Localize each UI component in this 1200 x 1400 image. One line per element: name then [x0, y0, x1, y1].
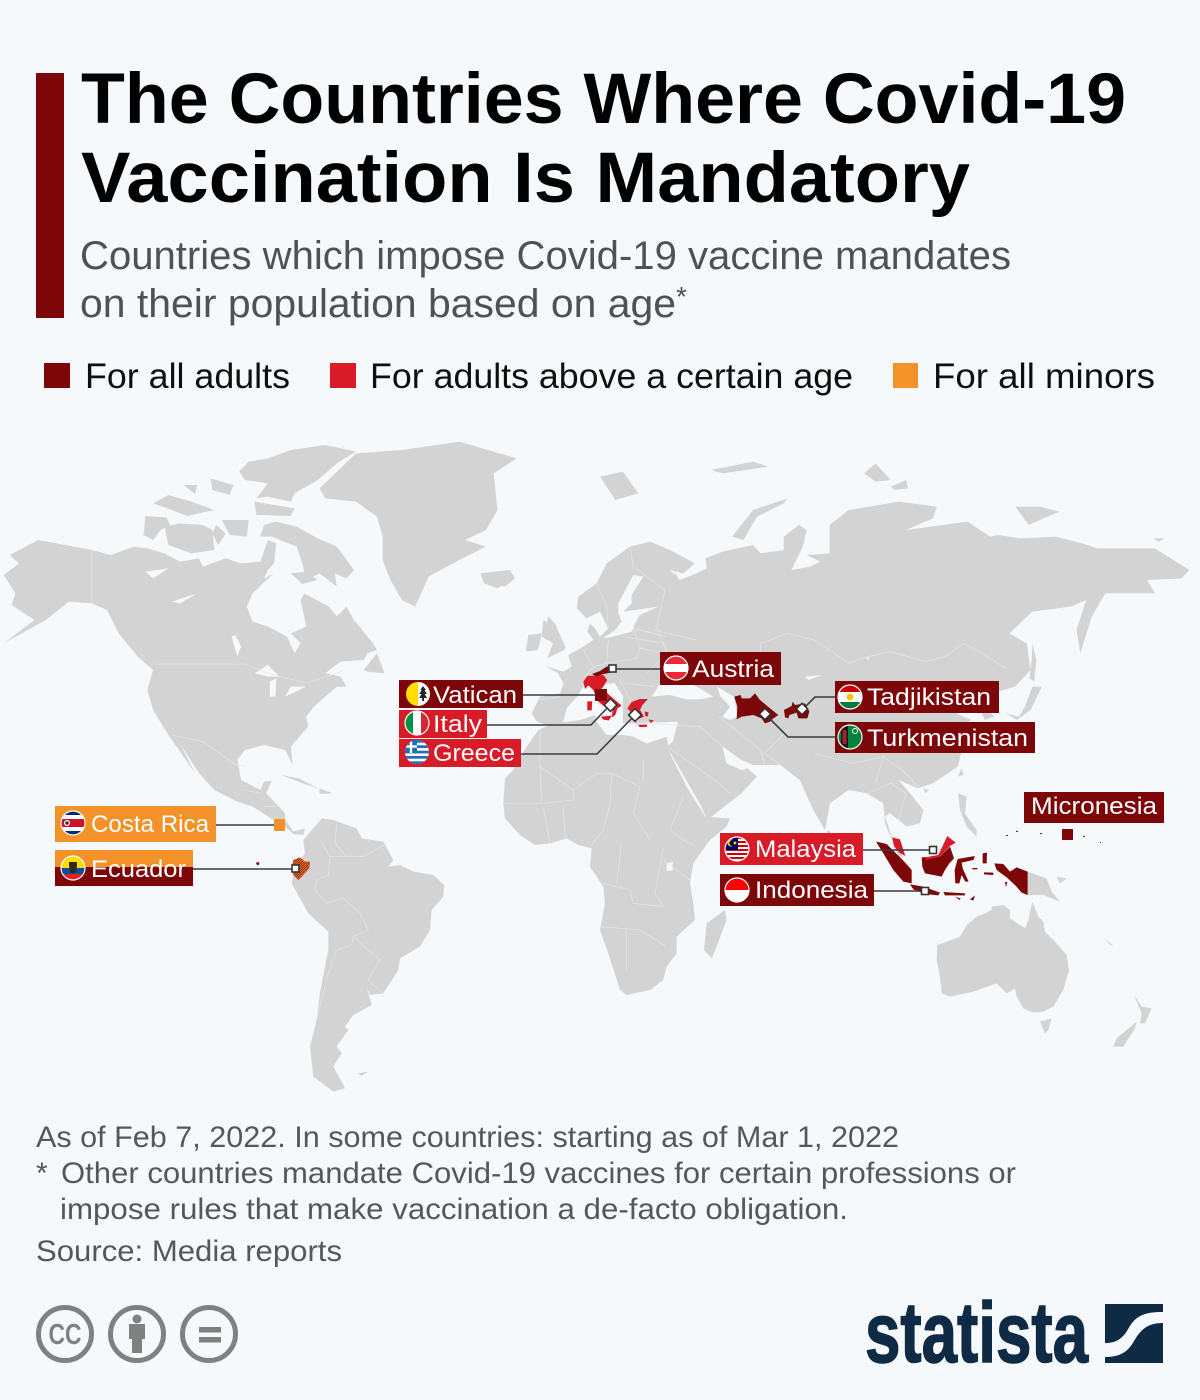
- icon: no derivatives: [182, 1308, 236, 1360]
- callout: vatican: [399, 680, 607, 709]
- callout: austria: [609, 652, 781, 685]
- callout: turkmenistan: [759, 708, 1035, 753]
- callout: malaysia: [720, 833, 936, 865]
- highlighted: austria: [592, 665, 616, 676]
- highlighted: ecuador: [256, 857, 310, 880]
- source: Source: Media reports: [36, 1235, 342, 1268]
- footnotes: [36, 1121, 1016, 1226]
- callout: italy: Italy: [433, 711, 483, 738]
- legend item: for all adults: For all adults: [85, 357, 290, 396]
- subtitle: on their population based on age: [80, 282, 676, 326]
- callout: indonesia: Indonesia: [755, 877, 868, 904]
- title: [81, 60, 1126, 218]
- callout: greece: [399, 709, 641, 767]
- legend item: for adults above a certain age: For adults above a certain age: [370, 357, 853, 396]
- icon: attribution: [110, 1308, 164, 1360]
- callout: ecuador: Ecuador: [91, 856, 186, 883]
- asia: [600, 462, 1189, 857]
- callout: turkmenistan: Turkmenistan: [867, 725, 1028, 752]
- subtitle: [80, 234, 1011, 326]
- north america lakes: [145, 568, 306, 697]
- highlighted: micronesia islands: [1006, 831, 1101, 843]
- icon: statista logo: [1105, 1304, 1163, 1363]
- callout: italy: [399, 699, 617, 738]
- callout: costa rica: [55, 806, 285, 842]
- callout: micronesia: Micronesia: [1031, 793, 1157, 820]
- footnotes: Other countries mandate Covid-19 vaccines for certain professions or: [61, 1157, 1016, 1190]
- inland and enclosed seas: [603, 575, 870, 871]
- highlighted: greece: [627, 699, 654, 727]
- callout: micronesia: [1024, 792, 1164, 840]
- callout: greece: Greece: [433, 740, 515, 767]
- highlighted: turkmenistan: [734, 693, 778, 723]
- highlighted: tajikistan: [784, 702, 809, 718]
- callout: ecuador: [55, 850, 299, 886]
- statista wordmark: statista: [865, 1286, 1089, 1381]
- country borders: [92, 547, 1006, 1020]
- callout: indonesia: [720, 874, 928, 906]
- philippines: [958, 793, 977, 837]
- europe: [500, 542, 740, 727]
- highlighted: italy: [583, 675, 622, 720]
- subtitle: Countries which impose Covid-19 vaccine mandates: [80, 234, 1011, 278]
- legend item: for all minors: For all minors: [933, 357, 1155, 396]
- footnotes: As of Feb 7, 2022. In some countries: starting as of Mar 1, 2022: [36, 1121, 899, 1154]
- world map: [4, 442, 1189, 1092]
- callout: malaysia: Malaysia: [755, 836, 856, 863]
- callout: tadjikistan: [796, 681, 999, 715]
- callout: tadjikistan: Tadjikistan: [867, 684, 991, 711]
- title: The Countries Where Covid-19: [81, 60, 1126, 139]
- north america and greenland: [4, 442, 564, 827]
- footnotes: impose rules that make vaccination a de-facto obligation.: [60, 1193, 848, 1226]
- legend: [44, 357, 1155, 396]
- title accent bar: [36, 73, 64, 318]
- callout: costa rica: Costa Rica: [91, 811, 209, 838]
- icon: creative commons: CC: [48, 1319, 82, 1351]
- footnotes: *: [36, 1157, 48, 1190]
- callout: vatican: Vatican: [433, 682, 517, 709]
- south america and africa: [283, 715, 730, 1092]
- title: Vaccination Is Mandatory: [81, 139, 971, 218]
- papua new guinea, australia and new zealand: [937, 872, 1152, 1047]
- icon: creative commons: [38, 1308, 92, 1360]
- highlighted: indonesia: [876, 842, 1028, 901]
- callout: austria: Austria: [692, 656, 774, 683]
- highlighted: malaysia: [892, 836, 956, 860]
- subtitle: *: [676, 281, 687, 312]
